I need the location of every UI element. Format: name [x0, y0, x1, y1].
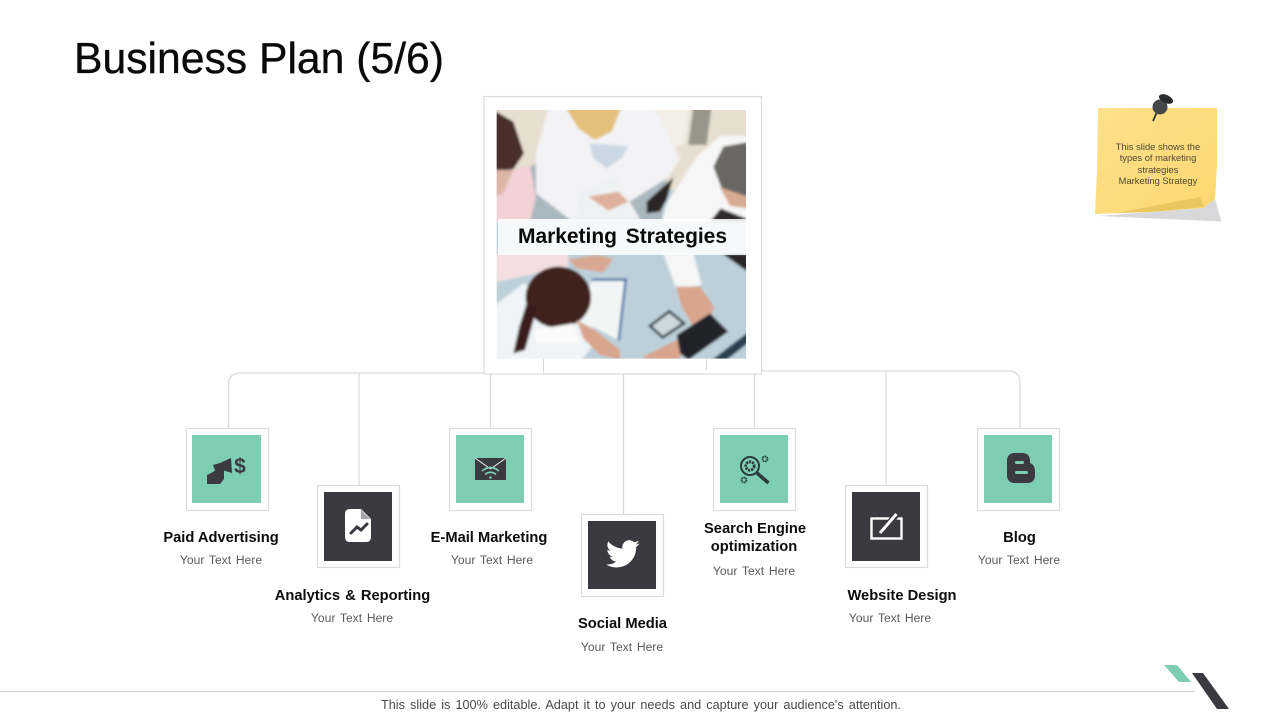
item: Search Engine optimization — [704, 428, 806, 578]
connector elbows over the card — [544, 359, 706, 372]
sub text: Your Text Here — [581, 640, 663, 654]
item: Website Design — [846, 486, 957, 625]
sub text: Your Text Here — [978, 553, 1060, 567]
tile — [978, 428, 1060, 510]
item: Analytics & Reporting — [275, 486, 430, 625]
photo frame — [484, 96, 762, 374]
pin — [1152, 92, 1174, 121]
central photo card — [484, 96, 762, 374]
sub text: Your Text Here — [451, 553, 533, 567]
tile — [714, 428, 796, 510]
tile — [582, 514, 664, 596]
footer text: This slide is 100% editable. Adapt it to your needs and capture your audience's attention. — [381, 698, 901, 712]
icon: blogger — [1007, 453, 1035, 483]
icon: twitter bird — [606, 540, 640, 567]
icon: screen with pen — [872, 514, 902, 538]
sub text: Your Text Here — [713, 564, 795, 578]
sub text: Your Text Here — [180, 553, 262, 567]
item: E-Mail Marketing — [431, 428, 547, 567]
sticky note — [1095, 92, 1222, 221]
tile — [450, 428, 532, 510]
icon: magnifier with gears — [741, 456, 768, 483]
item: Blog — [978, 428, 1060, 567]
label: Paid Advertising — [163, 530, 279, 546]
photo caption band — [498, 219, 746, 255]
label: Blog — [1003, 530, 1036, 546]
note shadow — [1099, 199, 1222, 222]
photo caption: Marketing Strategies — [518, 225, 727, 248]
tile — [186, 428, 268, 510]
title: Business Plan (5/6) — [74, 34, 444, 83]
icon: megaphone and dollar: $ — [234, 455, 246, 478]
photo: team around a table — [493, 107, 750, 363]
item: Social Media — [578, 514, 668, 654]
note paper — [1095, 108, 1217, 214]
sub text: Your Text Here — [849, 611, 931, 625]
connector lines — [228, 371, 1020, 514]
note text: strategies — [1138, 164, 1179, 175]
item: Paid Advertising — [163, 428, 279, 567]
note text — [1116, 141, 1200, 186]
label: Search Engine — [704, 521, 806, 537]
label: optimization — [711, 539, 797, 555]
logo mark — [1164, 665, 1229, 709]
sub text: Your Text Here — [311, 611, 393, 625]
icon: report document — [345, 509, 371, 542]
label: E-Mail Marketing — [431, 530, 547, 546]
note text: Marketing Strategy — [1119, 175, 1198, 186]
tile — [846, 486, 928, 568]
label: Website Design — [847, 588, 957, 604]
tile — [318, 486, 400, 568]
label — [704, 521, 806, 555]
label: Social Media — [578, 616, 668, 632]
note text: types of marketing — [1120, 152, 1196, 163]
label: Analytics & Reporting — [275, 588, 430, 604]
note fold — [1117, 197, 1204, 213]
icon: envelope with wifi — [475, 458, 506, 480]
note text: This slide shows the — [1116, 141, 1200, 152]
